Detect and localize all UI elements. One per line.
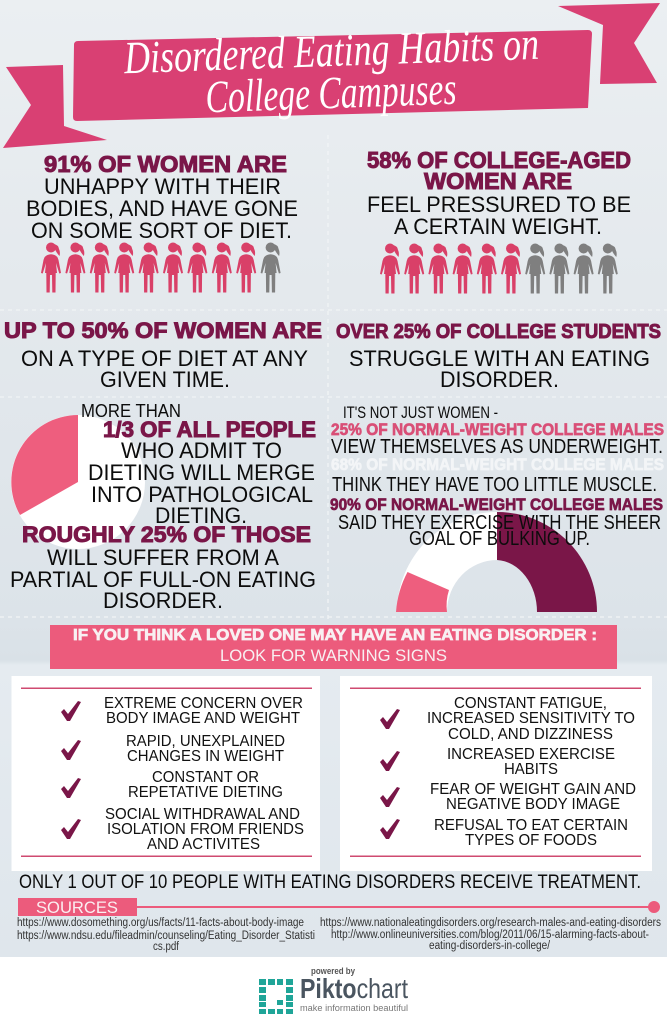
logo wordmark: Piktochart [300, 973, 408, 1004]
text: not just women: IT'S NOT JUST WOMEN - [343, 403, 498, 422]
title: College Campuses [205, 63, 457, 122]
text: bulking up [338, 512, 661, 550]
text: pathological dieting: DIETING. [155, 503, 247, 528]
checks [380, 709, 400, 839]
heading: 58%: 58% OF COLLEGE-AGED [367, 147, 631, 173]
sources list: https://www.dosomething.org/us/facts/11-facts-about-body-image [17, 917, 304, 929]
warning list: CONSTANT FATIGUE, [454, 695, 607, 712]
sources list: eating-disorders-in-college/ [429, 940, 551, 952]
warning list: EXTREME CONCERN OVER [104, 695, 303, 712]
panel: 91% of women [26, 151, 298, 292]
heading: 1/3: 1/3 OF ALL PEOPLE [103, 417, 316, 442]
warning list: ISOLATION FROM FRIENDS [107, 821, 304, 838]
warning list: CONSTANT OR [152, 769, 259, 786]
warning list: REPETATIVE DIETING [128, 784, 283, 801]
logo tagline: make information beautiful [300, 1003, 408, 1013]
text: type of diet: ON A TYPE OF DIET AT ANY [21, 346, 308, 371]
text: pathological dieting: DIETING WILL MERGE [88, 460, 315, 485]
warning list: TYPES OF FOODS [465, 832, 597, 849]
panel: up to 50% [4, 318, 322, 392]
text: unhappy: BODIES, AND HAVE GONE [26, 196, 298, 221]
donut chart [396, 512, 597, 612]
banner subheading: LOOK FOR WARNING SIGNS [220, 646, 447, 665]
warning list: FEAR OF WEIGHT GAIN AND [430, 781, 636, 798]
panel: more than 1/3 [10, 401, 316, 613]
text: will suffer: DISORDER. [103, 588, 223, 613]
warning list: HABITS [504, 761, 558, 778]
sources list [17, 917, 661, 953]
text: will suffer [10, 545, 316, 613]
text: pathological dieting: INTO PATHOLOGICAL [91, 482, 313, 507]
warning list [104, 695, 304, 853]
panel: warning signs right [340, 676, 652, 871]
text: more than: MORE THAN [81, 401, 181, 421]
heading: 58% [367, 147, 631, 194]
text: type of diet: GIVEN TIME. [100, 367, 230, 392]
text: bulking up: GOAL OF BULKING UP. [409, 528, 590, 550]
text: unhappy [26, 174, 298, 243]
sources header: SOURCES [36, 898, 118, 917]
text: pressured [367, 192, 631, 239]
heading: 91%: 91% OF WOMEN ARE [44, 151, 287, 177]
text: unhappy: ON SOME SORT OF DIET. [31, 218, 292, 243]
panel: 58% of college-aged women [367, 147, 631, 294]
heading: 58%: WOMEN ARE [424, 168, 572, 194]
text: pressured: FEEL PRESSURED TO BE [367, 192, 631, 217]
warning list: SOCIAL WITHDRAWAL AND [105, 806, 300, 823]
icon row: 6 of 10 women [380, 244, 618, 294]
heading: up to 50%: UP TO 50% OF WOMEN ARE [4, 318, 322, 343]
title [122, 18, 541, 125]
checks [61, 701, 81, 839]
text: struggle [349, 346, 650, 392]
logo mark [259, 979, 293, 1014]
warning list: RAPID, UNEXPLAINED [126, 733, 285, 750]
warning list: REFUSAL TO EAT CERTAIN [434, 817, 628, 834]
panel: over 25% [336, 321, 661, 392]
warning list: NEGATIVE BODY IMAGE [446, 796, 620, 813]
panel: not just women [330, 403, 664, 550]
warning list: INCREASED SENSITIVITY TO [427, 710, 635, 727]
text: pressured: A CERTAIN WEIGHT. [394, 214, 602, 239]
text: pathological dieting [88, 438, 315, 528]
banner right tail [558, 3, 660, 84]
sources list: https://www.ndsu.edu/fileadmin/counseling/Eating_Disorder_Statisti [17, 930, 315, 942]
powered by: powered by [311, 966, 355, 976]
warning list: BODY IMAGE AND WEIGHT [106, 710, 301, 727]
text: unhappy: UNHAPPY WITH THEIR [44, 174, 281, 199]
pie chart [11, 415, 145, 549]
warning list: COLD, AND DIZZINESS [448, 726, 613, 743]
warning list: AND ACTIVITES [147, 836, 260, 853]
title: Disordered Eating Habits on [122, 18, 540, 83]
banner heading: IF YOU THINK A LOVED ONE MAY HAVE AN EATING DISORDER : [73, 627, 597, 644]
text: struggle: DISORDER. [440, 367, 559, 392]
text: struggle: STRUGGLE WITH AN EATING [349, 346, 650, 371]
panel: warning signs left [12, 676, 320, 871]
text: will suffer: PARTIAL OF FULL-ON EATING [10, 567, 316, 592]
piktochart footer [259, 966, 408, 1014]
banner body [73, 30, 592, 121]
warning list: INCREASED EXERCISE [447, 746, 615, 763]
warning list [427, 695, 636, 849]
text: pathological dieting: WHO ADMIT TO [121, 438, 282, 463]
warning list: CHANGES IN WEIGHT [127, 748, 285, 765]
banner left tail [3, 65, 107, 148]
sources header [18, 898, 660, 917]
warning signs banner [50, 625, 617, 669]
sources list: cs.pdf [153, 941, 180, 953]
heading: roughly 25%: ROUGHLY 25% OF THOSE [22, 522, 311, 547]
text: type of diet [21, 346, 308, 392]
icon row: 9 of 10 women [41, 242, 281, 292]
title banner [3, 3, 660, 148]
text: will suffer: WILL SUFFER FROM A [47, 545, 279, 570]
